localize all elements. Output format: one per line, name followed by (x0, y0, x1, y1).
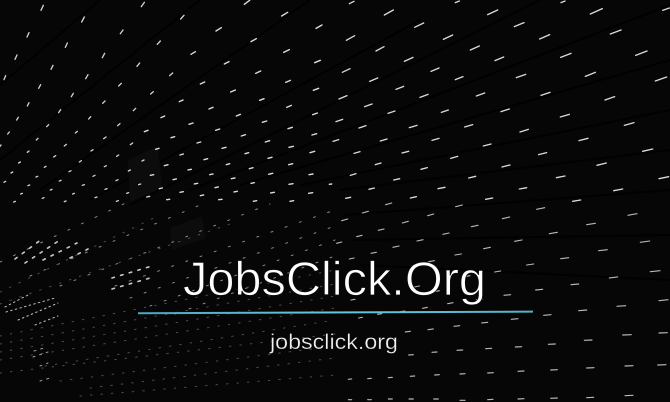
pattern: light dashes at the lower right (337, 203, 668, 400)
pattern: light dashes in the top half (0, 0, 669, 202)
divider: blue rule under the title (138, 312, 533, 313)
subtitle: jobsclick.org: jobsclick.org (269, 331, 398, 354)
title: JobsClick.Org: JobsClick.Org (183, 252, 486, 305)
pattern: dense dotted rows at the lower left (0, 201, 335, 396)
